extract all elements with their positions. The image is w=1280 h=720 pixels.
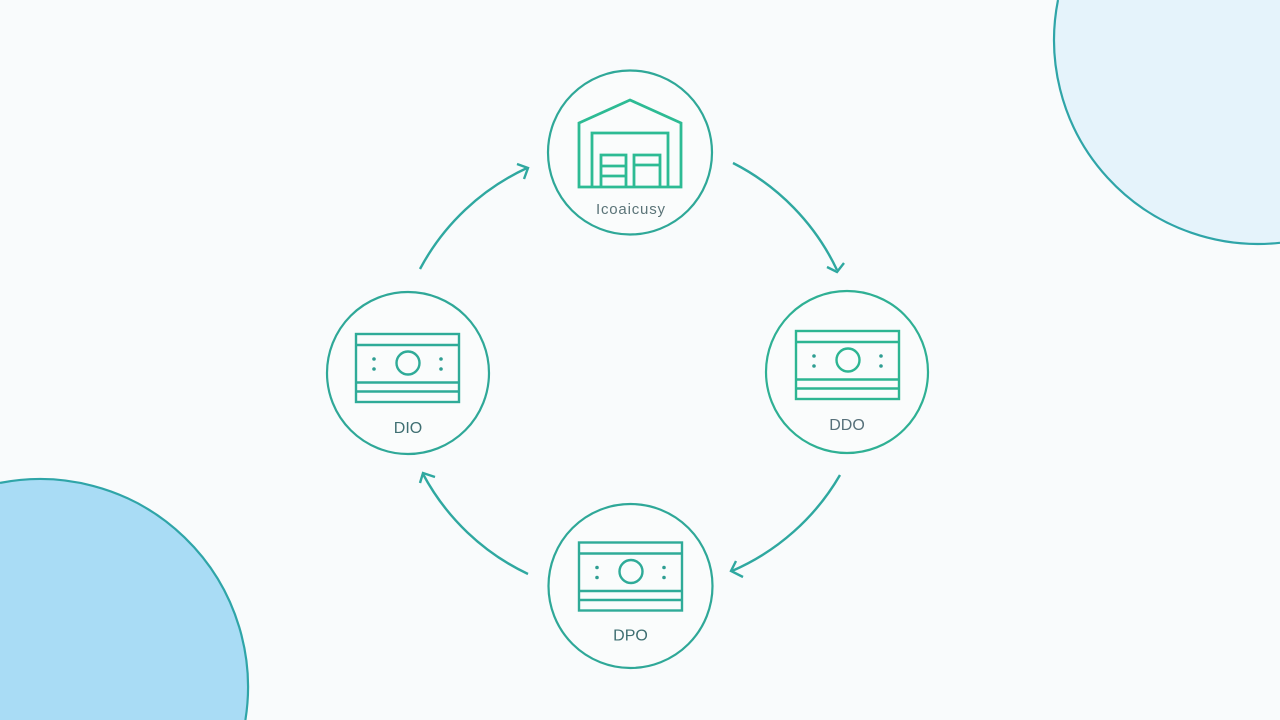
icon: banknote xyxy=(796,331,899,399)
arrow: DDO to DPO xyxy=(731,475,840,577)
label: DPO: DPO xyxy=(613,628,648,644)
arrow: DIO to inventory xyxy=(420,164,528,269)
node: DPO xyxy=(548,504,712,668)
label: inventory: Icoaicusy xyxy=(596,201,666,218)
icon: warehouse xyxy=(579,100,681,187)
node: DIO xyxy=(327,292,489,454)
icon: banknote xyxy=(579,542,682,610)
label: DDO: DDO xyxy=(829,417,865,434)
node: DDO xyxy=(766,291,928,453)
arrow: DPO to DIO xyxy=(420,473,528,574)
arrow: inventory to DDO xyxy=(733,163,844,272)
decorative circle: bottom left xyxy=(0,479,248,720)
label: DIO: DIO xyxy=(394,420,422,437)
decorative circle: top right xyxy=(1054,0,1280,244)
node: inventory warehouse xyxy=(548,70,712,234)
icon: banknote xyxy=(356,334,459,402)
